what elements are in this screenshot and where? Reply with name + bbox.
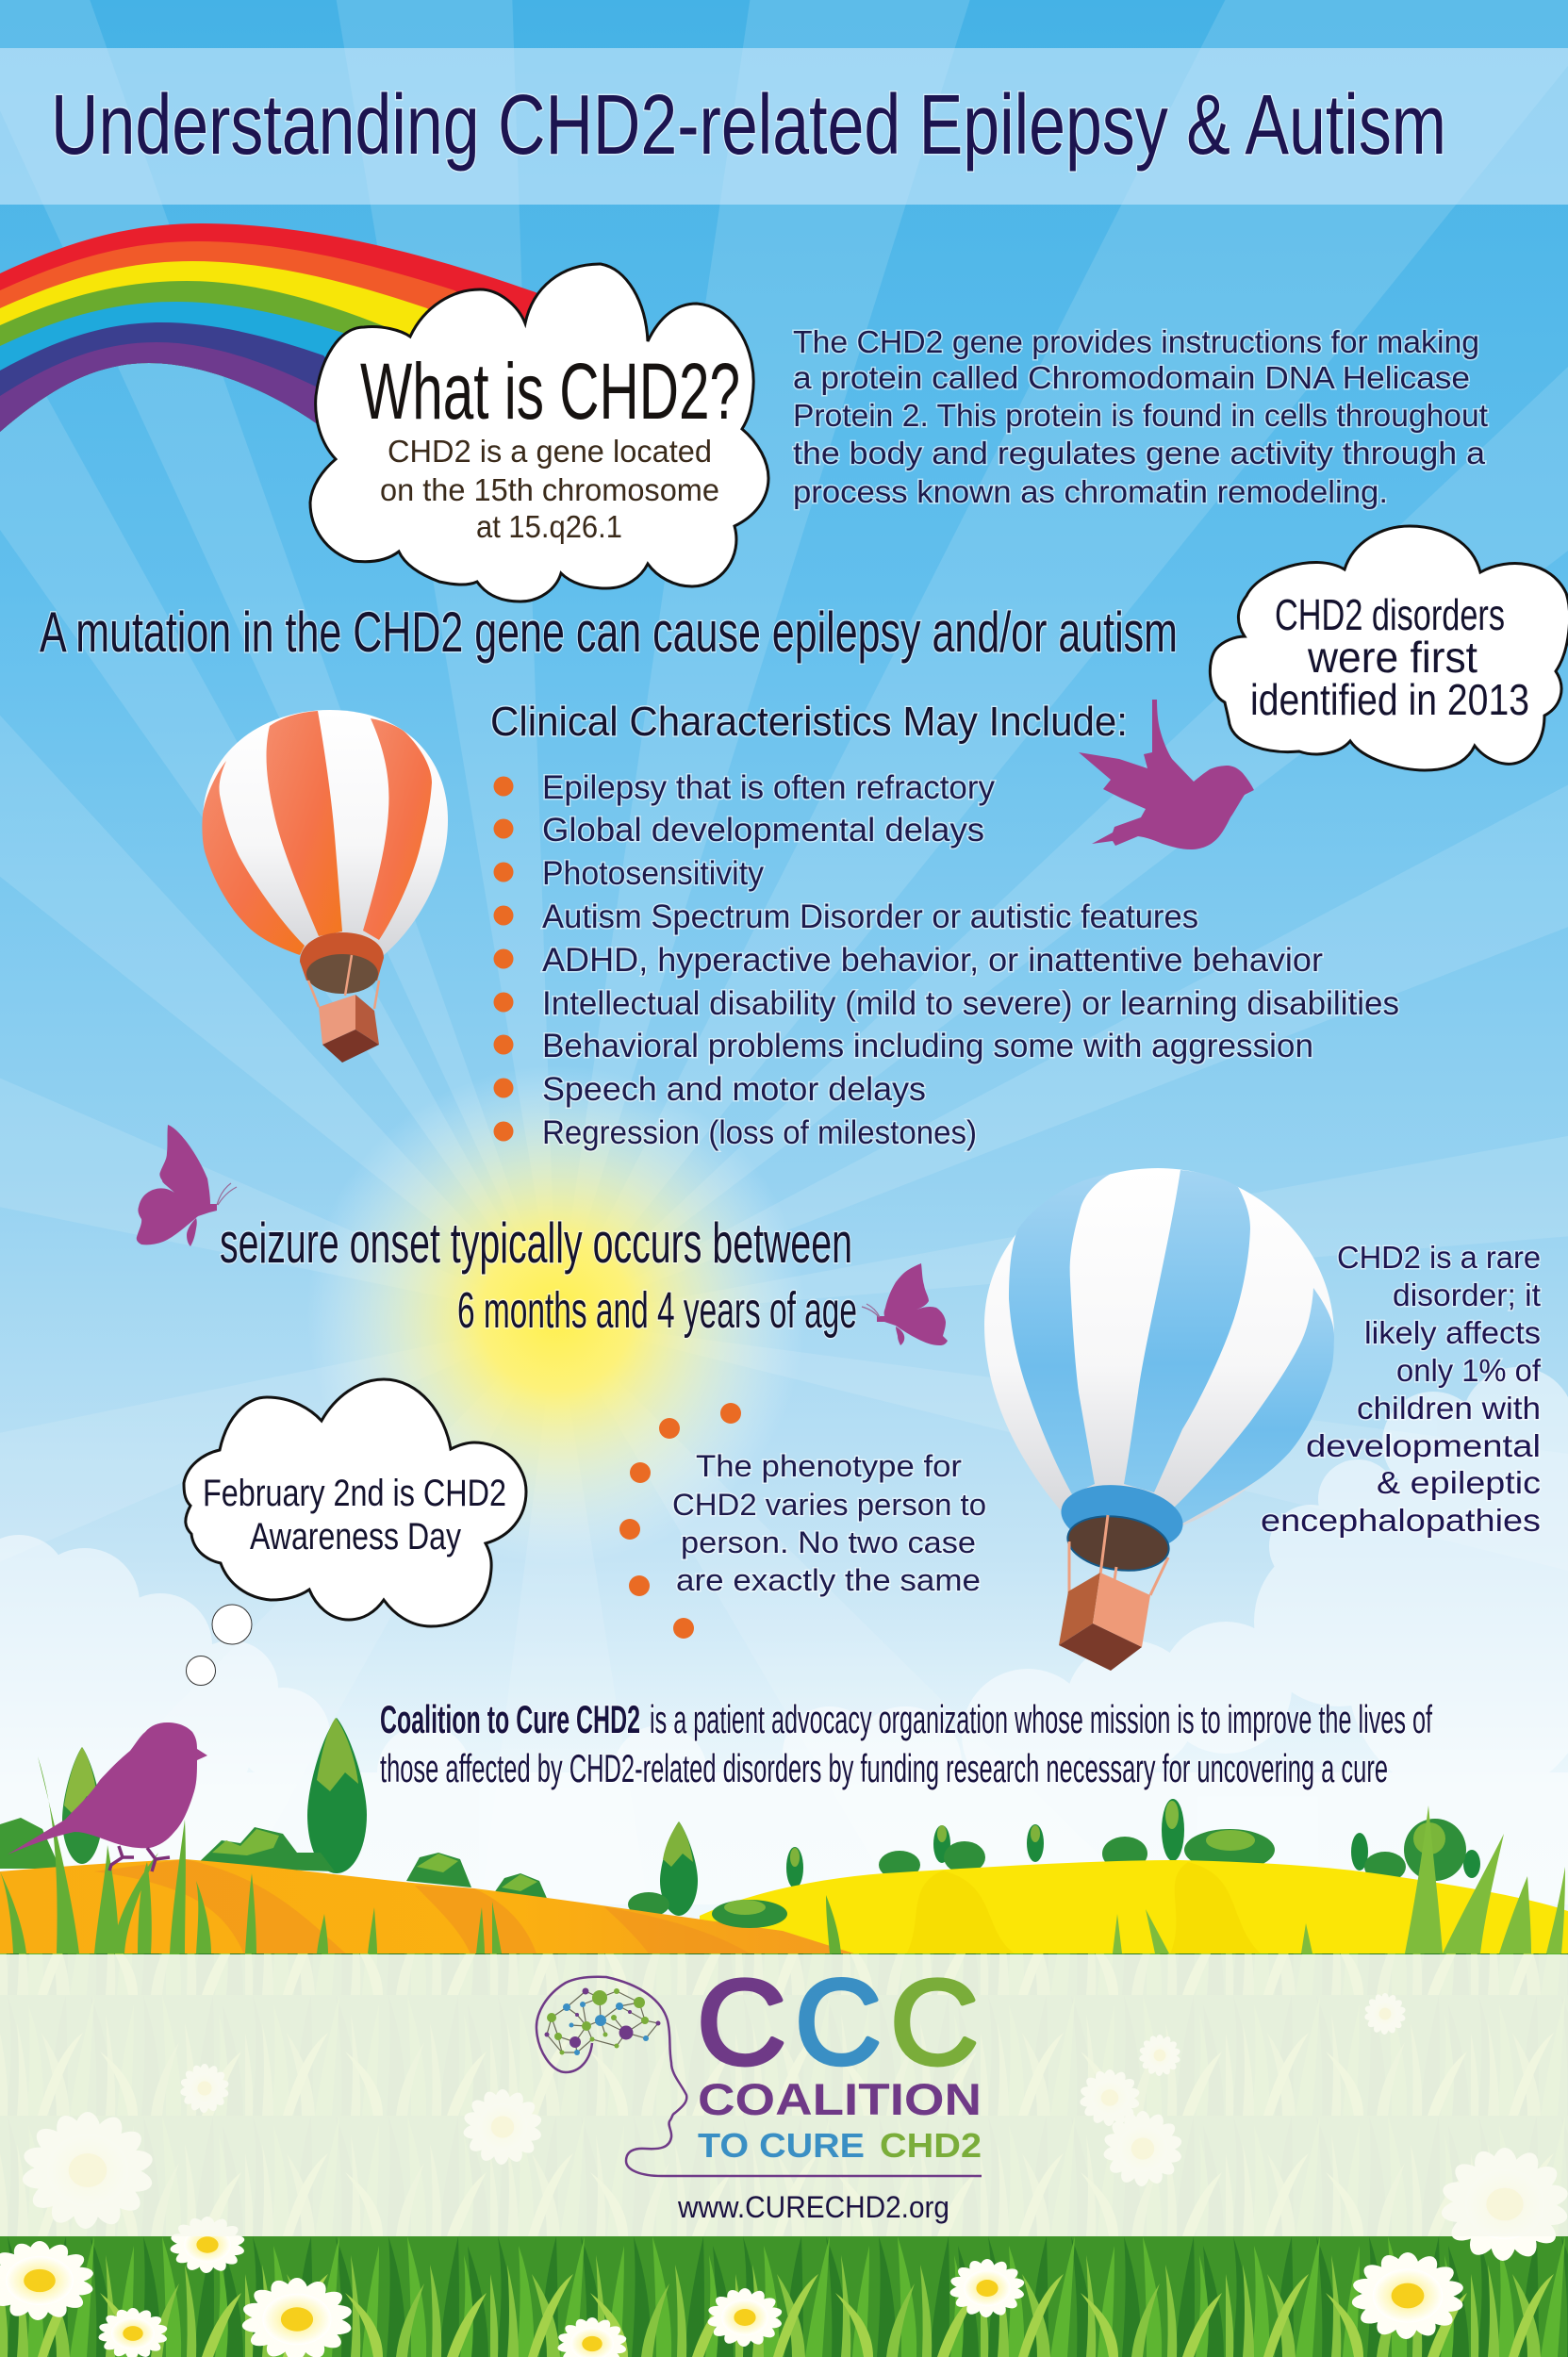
CHD2 description paragraph: The CHD2 gene provides instructions for making [793, 324, 1479, 359]
phenotype text: are exactly the same [676, 1563, 981, 1597]
bullets [494, 777, 513, 1141]
rare disorder text: children with [1357, 1391, 1541, 1426]
seizure onset text [220, 1211, 857, 1339]
list text: Speech and motor delays [542, 1071, 926, 1108]
location text: at 15.q26.1 [476, 509, 622, 544]
CHD2 description paragraph [793, 324, 1488, 509]
yellow field shading [905, 1862, 1263, 1956]
list text: ADHD, hyperactive behavior, or inattentive behavior [542, 942, 1323, 979]
list text: Epilepsy that is often refractory [542, 769, 995, 806]
balloon: blue [984, 1168, 1334, 1671]
rainbow [0, 223, 537, 432]
seizure onset text: seizure onset typically occurs between [220, 1211, 852, 1275]
awareness day text: Awareness Day [250, 1516, 461, 1558]
rare disorder text: likely affects [1364, 1315, 1541, 1350]
rare disorder text: only 1% of [1396, 1353, 1542, 1388]
seizure onset text: 6 months and 4 years of age [457, 1282, 857, 1339]
neck ring [300, 932, 384, 981]
field: yellow [700, 1860, 1568, 1956]
cloud: what is CHD2 [310, 264, 768, 602]
list text: Photosensitivity [542, 855, 764, 892]
ropes [308, 955, 379, 1009]
to cure chd2 wordmark: CHD2 [880, 2126, 982, 2165]
brain network [545, 1987, 660, 2055]
list text: Behavioral problems including some with aggression [542, 1028, 1313, 1064]
orange field shading [94, 1859, 754, 1956]
phenotype text: CHD2 varies person to [672, 1488, 986, 1522]
rare disorder text: encephalopathies [1261, 1503, 1541, 1538]
icon: purple bird top [1079, 700, 1254, 849]
translucent footer panel [0, 1954, 1568, 2236]
bird feet [109, 1846, 170, 1871]
envelope [984, 1168, 1334, 1526]
list text: Autism Spectrum Disorder or autistic features [542, 898, 1198, 935]
list text: Intellectual disability (mild to severe) or learning disabilities [542, 985, 1399, 1022]
CHD2 description paragraph: process known as chromatin remodeling. [793, 474, 1388, 509]
meadow ground [0, 1953, 1568, 2357]
basket [319, 995, 379, 1063]
awareness day text [203, 1473, 506, 1558]
list text: Regression (loss of milestones) [542, 1114, 977, 1151]
CCC letters [697, 1955, 979, 2090]
website url: www.CURECHD2.org [677, 2190, 949, 2224]
to cure chd2 wordmark: TO CURE [698, 2126, 865, 2165]
location text [380, 434, 719, 544]
coalition wordmark: COALITION [698, 2074, 982, 2124]
balloon: orange [202, 710, 448, 1063]
title banner [0, 48, 1568, 205]
cloud: first identified [1210, 526, 1568, 770]
first identified text: were first [1307, 633, 1477, 682]
logo [536, 1955, 982, 2176]
antenna [217, 1183, 237, 1205]
tail [187, 1218, 197, 1246]
icon: butterfly left [137, 1125, 237, 1246]
coalition mission text: Coalition to Cure CHD2 [380, 1697, 640, 1741]
list text [542, 769, 1399, 1151]
phenotype text [672, 1449, 986, 1597]
heading: what is CHD2: What is CHD2? [360, 347, 740, 436]
field: orange [0, 1859, 863, 1956]
envelope [203, 710, 448, 955]
phenotype text: person. No two case [681, 1525, 976, 1559]
CCC letters: C [890, 1955, 979, 2090]
burner mouth [1065, 1510, 1172, 1576]
rare disorder text: disorder; it [1393, 1277, 1541, 1312]
burner mouth [306, 954, 378, 994]
CHD2 description paragraph: a protein called Chromodomain DNA Helicase [793, 360, 1470, 395]
trees behind fields [62, 1718, 1480, 1916]
location text: on the 15th chromosome [380, 472, 719, 507]
clinical characteristics heading: Clinical Characteristics May Include: [490, 699, 1128, 745]
CHD2 description paragraph: Protein 2. This protein is found in cells throughout [793, 398, 1488, 433]
bush on field edge [712, 1900, 787, 1928]
neck ring [1057, 1477, 1187, 1558]
sun [306, 1065, 806, 1565]
tail [896, 1327, 904, 1345]
rare disorder text: developmental [1306, 1428, 1541, 1463]
rare disorder text: & epileptic [1377, 1465, 1541, 1500]
tall grass tufts [0, 1756, 1565, 1953]
rare disorder text [1261, 1240, 1542, 1538]
thought bubbles [187, 1605, 252, 1686]
first identified text [1250, 590, 1529, 724]
antenna [862, 1304, 880, 1317]
bushes [0, 1818, 1406, 1917]
head outline [536, 1977, 982, 2176]
CHD2 description paragraph: the body and regulates gene activity through a [793, 436, 1486, 470]
ropes [1069, 1515, 1168, 1595]
list of clinical characteristics [494, 769, 1399, 1151]
orange dots arc [619, 1403, 741, 1639]
rare disorder text: CHD2 is a rare [1337, 1240, 1541, 1275]
phenotype text: The phenotype for [696, 1449, 962, 1483]
icon: purple bird bottom [8, 1722, 207, 1871]
coalition mission text [380, 1697, 1432, 1790]
CCC letters: C [795, 1955, 882, 2090]
clouds [0, 1367, 1568, 1904]
stripes [202, 711, 432, 955]
basket [1059, 1573, 1150, 1671]
list text: Global developmental delays [542, 812, 984, 849]
cloud: awareness day [184, 1379, 526, 1626]
location text: CHD2 is a gene located [388, 434, 712, 469]
awareness day text: February 2nd is CHD2 [203, 1473, 506, 1514]
stripes [1009, 1170, 1334, 1525]
icon: butterfly right [862, 1263, 948, 1345]
CCC letters: C [697, 1955, 786, 2090]
daisies [0, 1993, 1568, 2357]
